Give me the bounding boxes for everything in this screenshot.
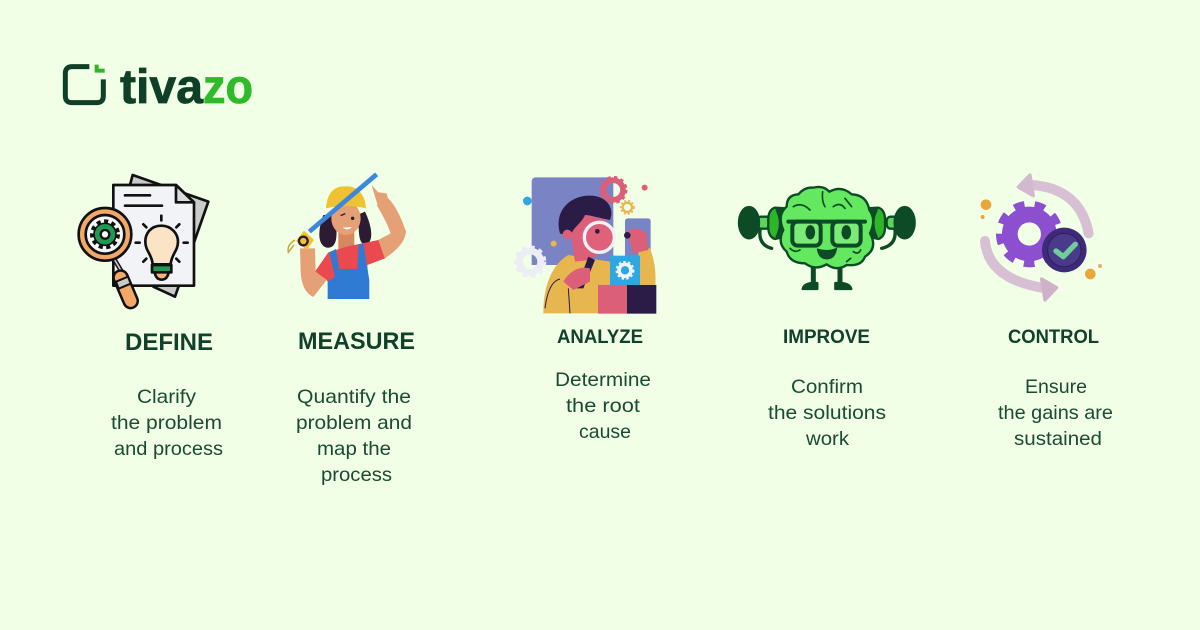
text: improve description: the solutions: [768, 402, 886, 424]
text: measure description: [296, 386, 412, 486]
text: analyze description: Determine: [555, 369, 651, 391]
text: analyze description: cause: [579, 421, 631, 443]
text: measure description: problem and: [296, 412, 412, 434]
icon: documents, magnifier with gear, light bulb: [79, 175, 208, 301]
heading: measure: MEASURE: [298, 328, 415, 355]
text: control description: the gains are: [998, 402, 1113, 424]
text: measure description: process: [321, 464, 392, 486]
heading: control: CONTROL: [1008, 326, 1099, 348]
text: measure description: map the: [317, 438, 391, 460]
icon: logo bracket square: [65, 65, 105, 103]
text: control description: [998, 376, 1113, 450]
text: control description: Ensure: [1025, 376, 1087, 398]
panel: analyze: [515, 177, 656, 443]
heading: improve: IMPROVE: [783, 326, 870, 348]
text: measure description: Quantify the: [297, 386, 411, 408]
text: improve description: Confirm: [791, 376, 863, 398]
icon: gear with check badge and cycle arrows: [981, 175, 1102, 300]
text: define description: and process: [114, 438, 223, 460]
logo wordmark: [120, 61, 253, 114]
heading: define: DEFINE: [125, 329, 213, 356]
logo wordmark: zo: [203, 61, 253, 114]
panel: improve: [739, 187, 915, 450]
logo wordmark: tiva: [120, 61, 203, 114]
icon: brain lifting dumbbells: [739, 187, 915, 289]
text: analyze description: the root: [566, 395, 641, 417]
panel: define: [79, 175, 223, 460]
text: define description: the problem: [111, 412, 222, 434]
text: define description: [111, 386, 223, 460]
panel: control: [981, 175, 1113, 450]
logo: tivazo: [65, 61, 253, 114]
heading: analyze: ANALYZE: [557, 326, 643, 348]
text: control description: sustained: [1014, 428, 1102, 450]
panel: measure: [288, 174, 415, 486]
text: improve description: work: [805, 428, 849, 450]
text: analyze description: [555, 369, 651, 443]
text: improve description: [768, 376, 886, 450]
icon: worker with measuring tape: [288, 174, 406, 299]
icon: person with magnifying glass and blocks: [515, 177, 656, 314]
text: define description: Clarify: [137, 386, 196, 408]
